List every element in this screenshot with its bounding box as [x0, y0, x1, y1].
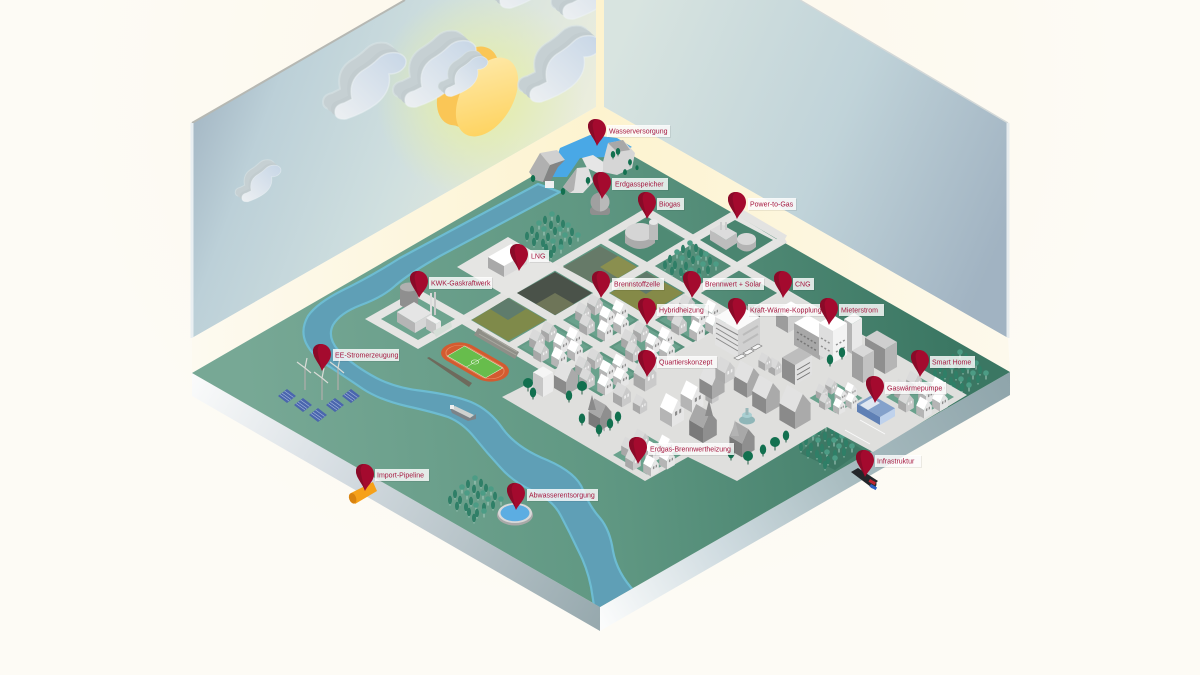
pin: LNG: LNG: [531, 254, 545, 260]
building: Gaswärmepumpe store: [845, 395, 895, 444]
pin: Infrastruktur: Infrastruktur: [877, 458, 915, 466]
building: town hall and apartments: [533, 361, 578, 397]
panel: KWK power plant: [365, 282, 471, 349]
pin: Biogas: [638, 192, 685, 219]
icon: fountain: [739, 408, 755, 424]
fields: [472, 246, 683, 341]
panel: Biogas block: [608, 218, 683, 262]
pin: Erdgas-Brennwertheizung: [629, 437, 735, 464]
pin: Biogas: Biogas: [659, 202, 681, 208]
pin: Erdgasspeicher: [593, 172, 669, 199]
pin: Power-to-Gas: Power-to-Gas: [750, 202, 794, 208]
icon: infrastructure cable: [851, 468, 878, 490]
pin: Infrastruktur: [856, 450, 922, 477]
pin: Wasserversorgung: [588, 119, 671, 146]
pin: Abwasserentsorgung: Abwasserentsorgung: [529, 492, 595, 500]
pin: EE-Stromerzeugung: EE-Stromerzeugung: [335, 352, 399, 360]
pin: Brennwert + Solar: Brennwert + Solar: [705, 282, 762, 288]
icon: gas storage sphere: [590, 192, 610, 215]
building: Mieterstrom row: [794, 313, 862, 363]
panel: green board: [192, 137, 1010, 607]
pin: Smart Home: Smart Home: [932, 360, 971, 366]
pin: Brennwert + Solar: [683, 271, 765, 298]
panel: slab sides: [192, 372, 1010, 631]
pin: KWK-Gaskraftwerk: KWK-Gaskraftwerk: [431, 280, 491, 288]
icon: forests: [448, 211, 989, 523]
pin: Brennstoffzelle: Brennstoffzelle: [614, 282, 660, 288]
pin: Erdgas-Brennwertheizung: Erdgas-Brennwertheizung: [650, 446, 731, 454]
icon: ship: [450, 405, 476, 421]
building: striped mid-rise: [782, 348, 812, 385]
pin: Kraft-Wärme-Kopplung: Kraft-Wärme-Kopplung: [750, 308, 822, 314]
panel: LNG block: [457, 237, 560, 297]
building: gabled row: [705, 352, 811, 429]
icon: sun: [389, 4, 570, 184]
trees: [523, 348, 845, 464]
building: office with helipad: [852, 330, 897, 383]
pin: CNG: [774, 271, 815, 298]
icon: wind turbines: [297, 358, 344, 400]
pin: Hybridheizung: Hybridheizung: [659, 308, 704, 314]
panel: city ground: [502, 290, 967, 481]
pin: Smart Home: [911, 350, 976, 377]
pin: Hybridheizung: [638, 298, 709, 325]
icon: sewage basin: [497, 503, 533, 526]
pin: LNG: [510, 244, 550, 271]
pin: Mieterstrom: [820, 298, 885, 325]
pin: Quartierskonzept: Quartierskonzept: [659, 360, 712, 366]
panel: cream floor strip: [192, 0, 1010, 373]
pin: Kraft-Wärme-Kopplung: [728, 298, 825, 325]
icon: solar panels: [278, 389, 360, 422]
pin: Gaswärmepumpe: [866, 376, 947, 403]
pin: Power-to-Gas: [728, 192, 797, 219]
building: apartments with terraces: [715, 304, 760, 358]
panel: right wall: [604, 0, 1008, 338]
panel: Power-to-Gas block: [692, 214, 783, 270]
pin: Gaswärmepumpe: Gaswärmepumpe: [887, 386, 942, 392]
city buildings: [523, 301, 897, 464]
river: [303, 184, 635, 612]
pin: Brennstoffzelle: [592, 271, 665, 298]
building: churches: [588, 395, 755, 457]
road network: [463, 212, 831, 428]
pin: Abwasserentsorgung: [507, 483, 599, 510]
icon: clouds: [235, 0, 634, 202]
icon: mountains and reservoir: [529, 135, 639, 196]
pin: Wasserversorgung: Wasserversorgung: [609, 128, 668, 136]
pin: EE-Stromerzeugung: [313, 344, 400, 371]
panel: stadium: [427, 328, 519, 387]
building: town houses: [599, 356, 735, 432]
panel: left wall with sky: [192, 0, 634, 338]
cars: [734, 344, 762, 360]
pin: Import-Pipeline: [356, 464, 430, 491]
pin: CNG: CNG: [795, 282, 811, 288]
pin: Erdgasspeicher: Erdgasspeicher: [615, 182, 664, 188]
house blocks: [521, 293, 954, 477]
pin: KWK-Gaskraftwerk: [410, 271, 493, 298]
building: CNG station: [776, 301, 803, 333]
pin: Import-Pipeline: Import-Pipeline: [377, 472, 424, 480]
icon: import pipeline: [347, 482, 377, 505]
pin: Quartierskonzept: [638, 350, 718, 377]
pin: Mieterstrom: Mieterstrom: [841, 308, 878, 314]
